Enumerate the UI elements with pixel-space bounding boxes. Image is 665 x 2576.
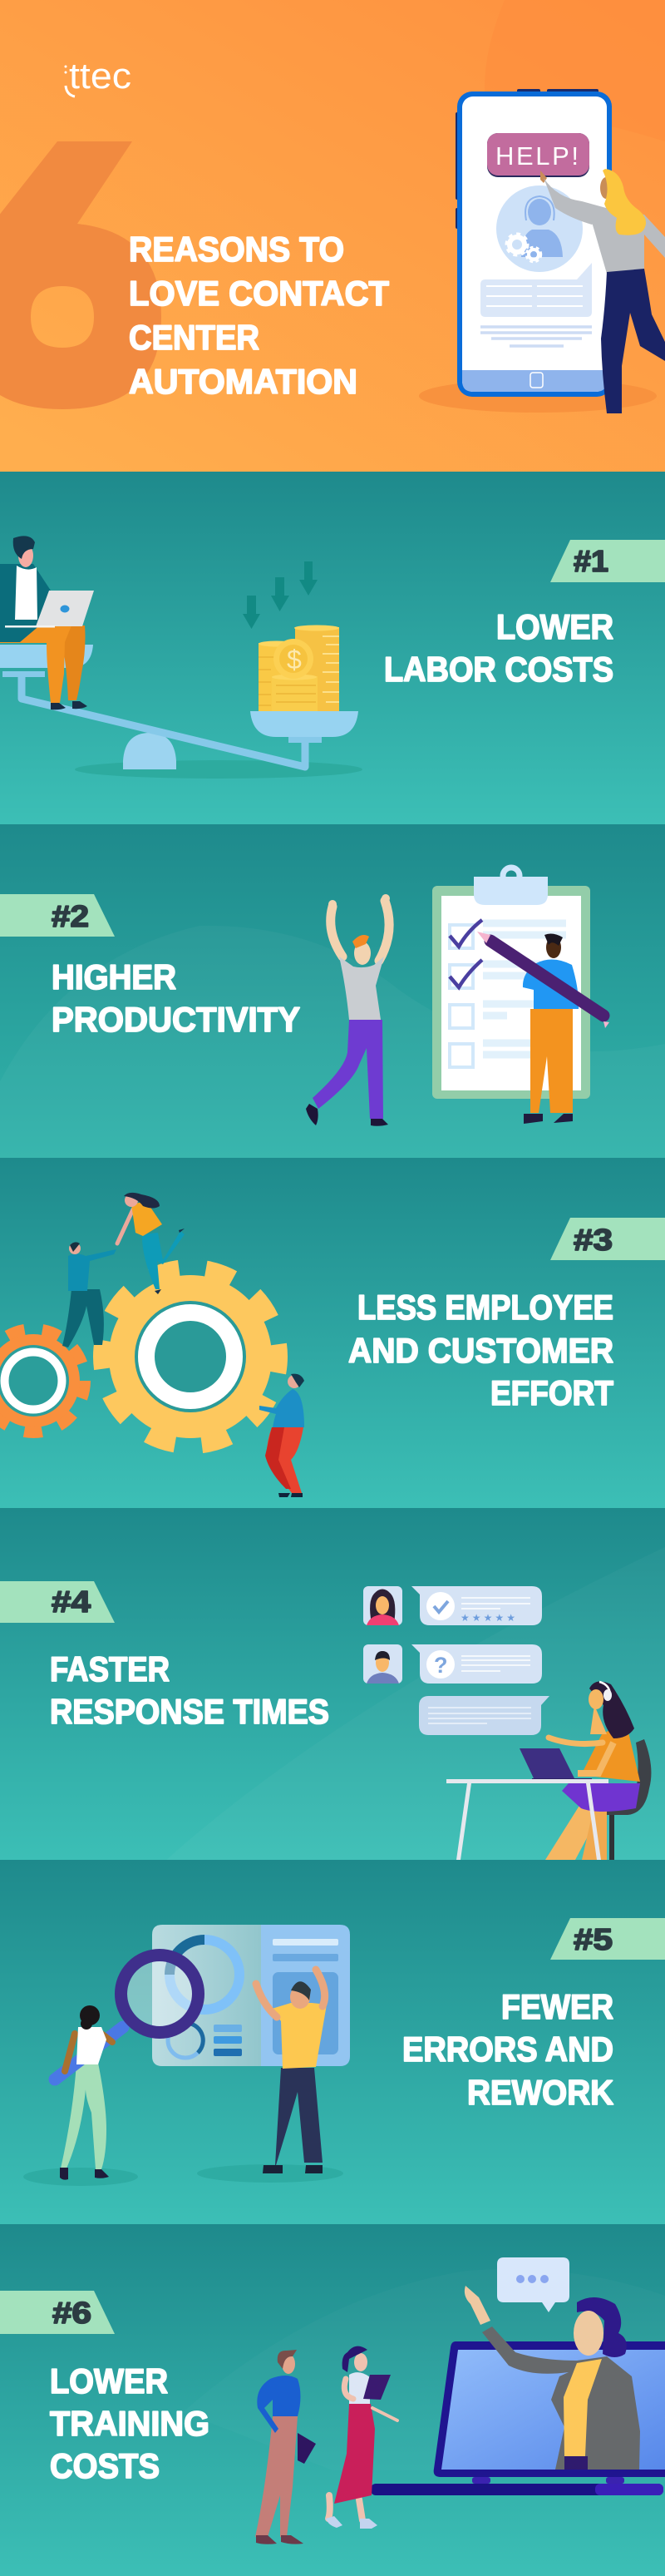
- panel: reason 6: [0, 2224, 665, 2576]
- panel: reason 5: [0, 1860, 665, 2224]
- heading: faster response times: RESPONSE TIMES: [50, 1692, 329, 1731]
- person: man at dashboard: [256, 1970, 327, 2173]
- tag: #2: [0, 894, 115, 937]
- heading: higher productivity: HIGHER: [52, 957, 176, 996]
- panel: header: [0, 0, 665, 472]
- heading: fewer errors and rework: [402, 1987, 613, 2112]
- tag: #5: #5: [574, 1922, 613, 1956]
- heading: higher productivity: PRODUCTIVITY: [52, 1000, 300, 1039]
- heading: less employee and customer effort: [348, 1288, 613, 1412]
- big number 6: [0, 141, 161, 409]
- heading: fewer errors and rework: ERRORS AND: [402, 2030, 613, 2069]
- tag: #6: #6: [52, 2296, 91, 2330]
- illustration: seesaw: [0, 645, 362, 779]
- person: woman on gear: [117, 1193, 185, 1294]
- tag: #3: #3: [574, 1223, 613, 1257]
- illustration: large gear: [91, 1258, 289, 1456]
- heading: less employee and customer effort: AND CUSTOMER: [348, 1331, 613, 1370]
- heading: lower training costs: COSTS: [50, 2446, 160, 2485]
- heading: lower labor costs: LOWER: [496, 607, 613, 646]
- heading: faster response times: [50, 1649, 329, 1731]
- panel: reason 3: [0, 1158, 665, 1508]
- tag: #4: [0, 1581, 115, 1623]
- phone: [456, 89, 612, 397]
- person: man climbing: [62, 1242, 116, 1347]
- floor shadows: [23, 2164, 343, 2186]
- illustration: monitor: [371, 2341, 665, 2495]
- chat bubble: [480, 263, 592, 346]
- chat bubble: reply: [419, 1696, 549, 1735]
- person: man with pencil: [477, 932, 609, 1124]
- person: cheering man: [306, 894, 390, 1126]
- title: CENTER: [129, 318, 259, 357]
- tag: #3: [550, 1218, 665, 1260]
- person: man pushing gear: [259, 1374, 304, 1497]
- heading: faster response times: FASTER: [50, 1649, 170, 1688]
- icon: magnifying glass: [121, 1955, 198, 2033]
- illustration: coins: $: [287, 645, 302, 675]
- heading: lower training costs: [50, 2361, 209, 2485]
- person: man with notebook: [255, 2350, 316, 2544]
- heading: higher productivity: [52, 957, 300, 1039]
- chat bubble: question: [411, 1644, 542, 1684]
- person: woman pressing help: [540, 169, 665, 413]
- tag: #4: #4: [52, 1585, 91, 1619]
- heading: fewer errors and rework: REWORK: [467, 2073, 613, 2112]
- heading: lower training costs: LOWER: [50, 2361, 168, 2400]
- title: [129, 230, 389, 401]
- tag: #1: #1: [574, 544, 608, 578]
- icon: down arrows: [243, 561, 318, 629]
- avatar: agent: [496, 185, 583, 272]
- floor shadow: [419, 379, 657, 413]
- speech bubble: [497, 2257, 569, 2312]
- person: agent at desk: [446, 1681, 651, 1860]
- heading: less employee and customer effort: LESS EMPLOYEE: [357, 1288, 613, 1327]
- heading: less employee and customer effort: EFFORT: [490, 1373, 613, 1412]
- button: help: [487, 133, 589, 177]
- illustration: clipboard: [432, 868, 590, 1099]
- chat bubble: check and rating: [411, 1586, 542, 1625]
- illustration: coins: [259, 625, 339, 711]
- avatar: woman: [363, 1586, 402, 1625]
- dashboard panel: [152, 1925, 350, 2066]
- tag: #6: [0, 2291, 115, 2334]
- heading: lower labor costs: [384, 607, 613, 689]
- title: LOVE CONTACT: [129, 274, 389, 313]
- panel: reason 2: [0, 824, 665, 1158]
- title: AUTOMATION: [129, 362, 357, 401]
- logo: ttec: ttec: [69, 56, 131, 96]
- person: woman with magnifier: [55, 2005, 123, 2180]
- panel: reason 4: [0, 1508, 665, 1860]
- heading: lower training costs: TRAINING: [50, 2404, 209, 2443]
- heading: fewer errors and rework: FEWER: [501, 1987, 613, 2026]
- person: woman with tablet: [326, 2346, 397, 2529]
- tag: #5: [550, 1918, 665, 1960]
- person: presenter: [465, 2286, 640, 2470]
- heading: lower labor costs: LABOR COSTS: [384, 650, 613, 689]
- tag: #2: #2: [52, 899, 89, 933]
- person: man with laptop: [0, 536, 94, 710]
- title: REASONS TO: [129, 230, 344, 269]
- chat bubble: check and rating: ★★★★★: [461, 1612, 515, 1624]
- chat bubble: question: ?: [434, 1653, 447, 1678]
- illustration: small gear: [0, 1331, 83, 1431]
- panel: reason 1: [0, 472, 665, 824]
- tag: #1: [550, 540, 665, 582]
- avatar: man: [363, 1644, 402, 1684]
- button: help: HELP!: [495, 141, 579, 171]
